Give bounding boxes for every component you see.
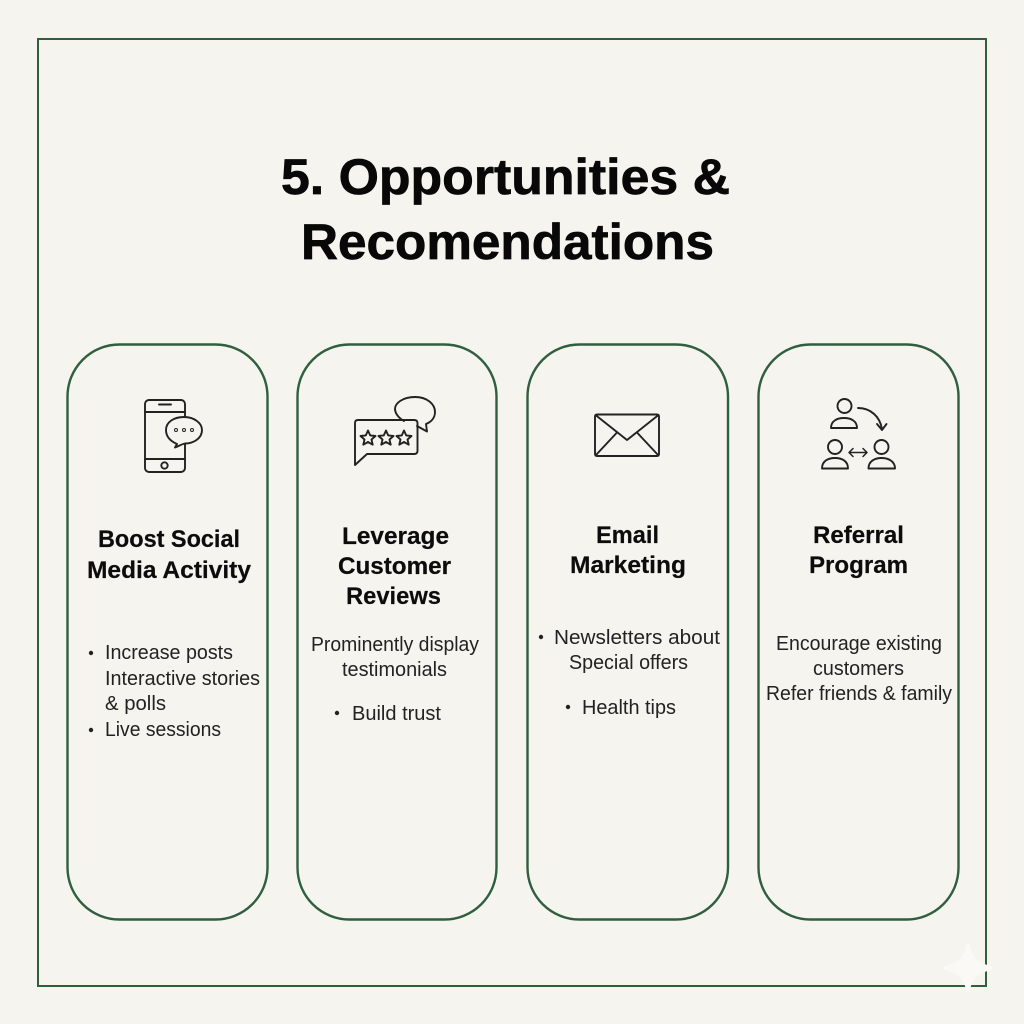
icon: phone with chat bubble xyxy=(145,400,202,472)
icon: sparkle watermark xyxy=(944,944,992,992)
heading: leverage customer reviews xyxy=(338,523,451,610)
text block: testimonials: Build trust xyxy=(352,703,441,725)
text block: social media actions: Interactive stories xyxy=(105,668,260,690)
panel: boost social media activity xyxy=(68,344,268,920)
text block: social media actions: Live sessions xyxy=(105,719,221,741)
text block: newsletters: Health tips xyxy=(582,697,676,719)
heading: referral program xyxy=(809,522,908,579)
text block: newsletters: Newsletters about xyxy=(554,627,720,649)
heading: referral program: Program xyxy=(809,552,908,579)
icon: envelope xyxy=(595,414,659,456)
heading: leverage customer reviews: Customer xyxy=(338,553,451,580)
icon: review bubbles with stars xyxy=(355,397,435,465)
heading: boost social media activity xyxy=(87,526,252,584)
heading: email marketing: Email xyxy=(596,522,659,549)
text block: testimonials: Prominently display xyxy=(311,634,479,656)
text block: newsletters xyxy=(539,627,720,719)
text block: newsletters: Special offers xyxy=(569,652,688,674)
panel: leverage customer reviews xyxy=(298,344,496,920)
heading: referral program: Referral xyxy=(813,522,904,549)
text block: social media actions: Increase posts xyxy=(105,642,233,664)
heading: leverage customer reviews: Leverage xyxy=(342,523,449,550)
panel: referral program xyxy=(758,344,958,920)
text block: social media actions: & polls xyxy=(105,693,166,715)
text block: testimonials xyxy=(311,634,479,725)
text block: testimonials: testimonials xyxy=(342,659,447,681)
text block: referral description: Encourage existing xyxy=(776,633,942,655)
heading: email marketing: Marketing xyxy=(570,552,686,579)
heading: boost social media activity: Media Activity xyxy=(87,557,252,584)
title xyxy=(281,149,730,270)
icon: referral people with arrows xyxy=(822,399,895,468)
text block: social media actions xyxy=(89,642,260,741)
panel: email marketing xyxy=(528,344,728,920)
text block: referral description: customers xyxy=(813,658,904,680)
heading: boost social media activity: Boost Social xyxy=(98,526,240,553)
heading: email marketing xyxy=(570,522,686,579)
title: Recomendations xyxy=(301,214,714,270)
heading: leverage customer reviews: Reviews xyxy=(346,583,441,610)
text block: referral description xyxy=(766,633,952,705)
title: 5. Opportunities & xyxy=(281,149,730,205)
text block: referral description: Refer friends & family xyxy=(766,683,952,705)
